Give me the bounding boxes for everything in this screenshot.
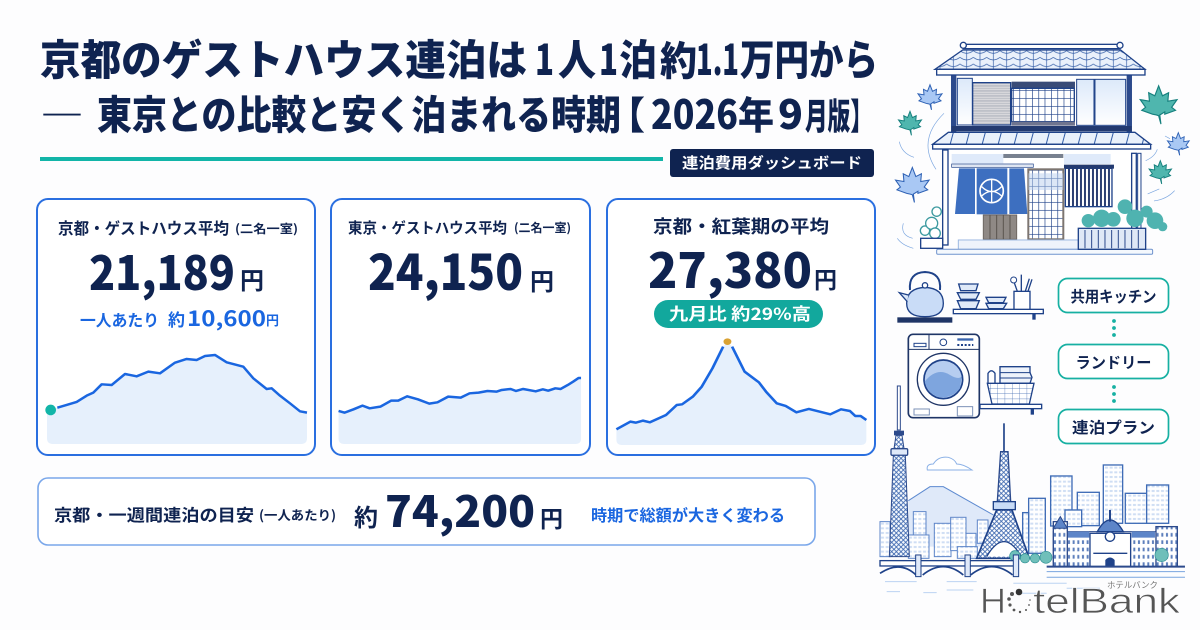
title: 年 (738, 85, 774, 140)
value: 21,189 yen: 21,189 (89, 235, 235, 304)
title: 9 (778, 83, 803, 141)
label: 京都・一週間連泊の目安 (54, 502, 254, 526)
panel: one-week stay estimate (38, 478, 815, 545)
connector dots (1112, 385, 1116, 403)
value: 27,380 yen: 27,380 (648, 232, 812, 302)
panel: Kyoto guesthouse average (37, 199, 315, 455)
logo: HotelBank: telBank (1033, 582, 1181, 621)
card heading: (二名一室) (235, 220, 298, 237)
pill: laundry: ランドリー (1076, 351, 1152, 373)
panel: Kyoto autumn leaves average (607, 199, 875, 455)
Tokyo Tower (977, 423, 1029, 558)
maple leaves (896, 85, 1189, 202)
main roof (935, 42, 1145, 75)
value: about 74,200 yen: 円 (540, 500, 563, 534)
per-person note: 約 (168, 306, 185, 331)
value: 27,380 yen: 円 (814, 261, 837, 295)
title rule (40, 157, 663, 161)
illustration: washing machine and laundry (908, 334, 1042, 418)
line chart: Tokyo yearly (339, 378, 581, 444)
illustration: Kyoto townhouse (896, 42, 1189, 254)
per-person note: 一人あたり (80, 307, 159, 331)
right buildings (1023, 465, 1169, 553)
note: 時期で総額が大きく変わる (591, 502, 785, 526)
pill: shared kitchen (1058, 278, 1168, 312)
pill: 29% higher than September (654, 300, 823, 328)
card heading: 京都・ゲストハウス平均 (58, 215, 229, 239)
line chart: Kyoto yearly (45, 355, 307, 444)
wind lines (897, 113, 1175, 248)
per-person note (80, 303, 279, 333)
ground floor (943, 150, 1141, 245)
Mt Fuji (908, 487, 993, 547)
title: 約 (660, 29, 697, 87)
laundry basket (980, 367, 1042, 415)
label: (一人あたり) (259, 505, 336, 524)
title: 1 (535, 27, 554, 88)
feature list (1058, 278, 1168, 444)
dashboard badge (670, 149, 874, 177)
card heading: 京都・紅葉期の平均 (653, 213, 829, 239)
line chart: Kyoto autumn peak (616, 338, 866, 445)
trees (1010, 548, 1168, 563)
pill: shared kitchen: 共用キッチン (1070, 285, 1156, 307)
value: 21,189 yen: 円 (240, 261, 264, 296)
planters and steps (920, 199, 1167, 254)
value: about 74,200 yen: 約 (354, 498, 378, 533)
cloud (927, 457, 972, 470)
connector dots (1112, 319, 1116, 337)
per-person note: 10,600 (187, 303, 266, 333)
title: 1 (599, 27, 618, 88)
logo: HotelBank (980, 580, 1181, 621)
value: about 74,200 yen (354, 478, 563, 540)
value: 24,150 yen: 24,150 (368, 234, 523, 305)
card heading: (二名一室) (514, 219, 571, 236)
dashboard badge: 連泊費用ダッシュボード (682, 152, 862, 173)
title: ― (40, 85, 84, 140)
upper floor (951, 75, 1132, 132)
bridge and embankment (880, 555, 1185, 577)
title: 1.1 (696, 27, 739, 88)
per-person note: 円 (266, 310, 279, 329)
lower roof (933, 132, 1151, 149)
illustration: kitchen shelf (897, 272, 1043, 323)
title: 2026 (651, 83, 738, 141)
pill: laundry (1058, 344, 1168, 378)
Mt Fuji ridge (908, 487, 993, 515)
noren curtain (955, 168, 1027, 214)
panel: Tokyo guesthouse average (331, 199, 590, 455)
logo dots (1007, 589, 1031, 613)
card heading: 東京・ゲストハウス平均 (348, 217, 507, 238)
value: 24,150 yen: 円 (530, 262, 554, 297)
title: 東京との比較と安く泊まれる時期 (97, 83, 621, 141)
kettle (897, 272, 952, 323)
title: 月版】 (805, 88, 873, 140)
Tokyo Skytree (889, 386, 909, 557)
pill: long-stay plan: 連泊プラン (1072, 416, 1155, 438)
title: 【 (607, 85, 645, 140)
title: 万円から (740, 27, 878, 88)
river ripples (885, 582, 1100, 593)
value: about 74,200 yen: 74,200 (385, 478, 535, 540)
pill: 29% higher than September: 九月比 約29%高 (669, 300, 811, 325)
title: 泊 (619, 27, 657, 88)
illustration: Tokyo skyline (880, 386, 1185, 593)
pill: long-stay plan (1058, 410, 1168, 444)
washing machine (908, 334, 979, 418)
dishes and utensils on shelf (953, 275, 1043, 320)
logo: HotelBank: ホテルバンク (1107, 580, 1158, 590)
Tokyo Station (1053, 510, 1177, 567)
logo: HotelBank: H (980, 582, 1006, 621)
title: 京都のゲストハウス連泊は (40, 27, 527, 88)
left buildings (880, 512, 988, 558)
title: 人 (558, 27, 596, 88)
title (40, 27, 878, 141)
label (54, 502, 336, 526)
